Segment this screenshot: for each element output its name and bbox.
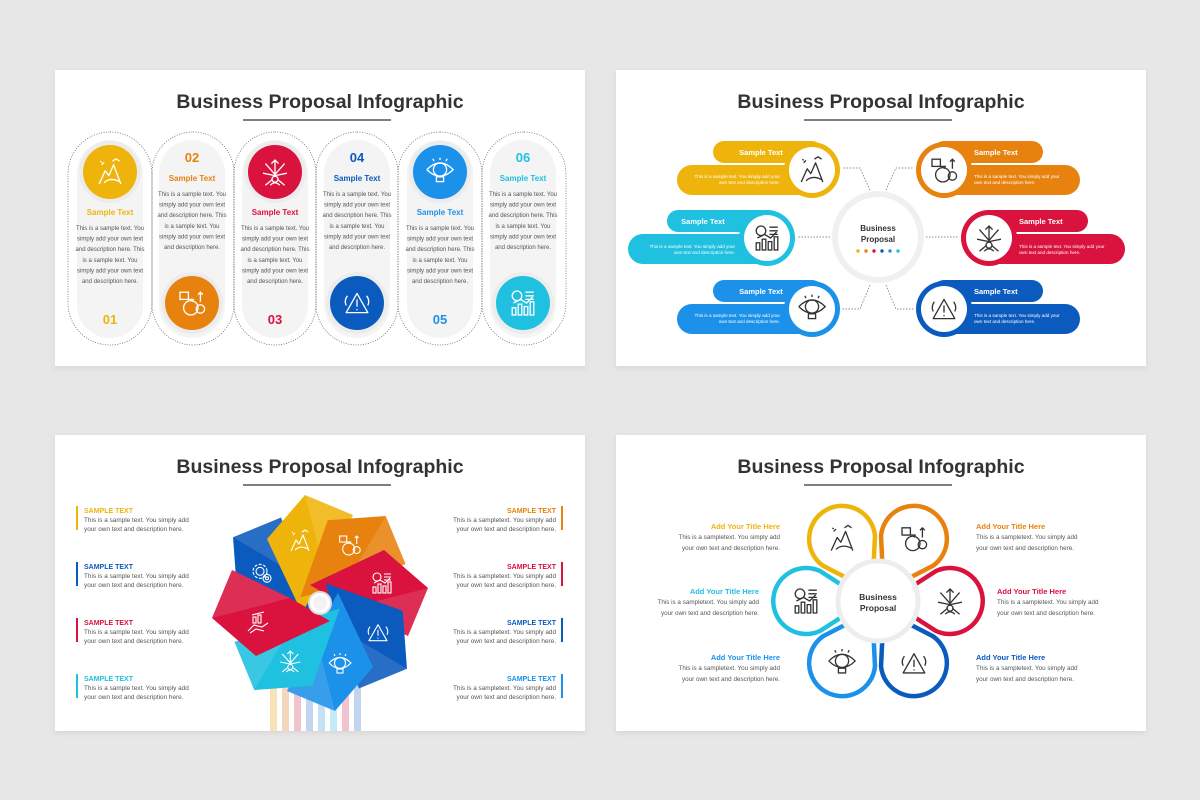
step 06: is a sample text. You	[495, 224, 551, 230]
slide 2: hub diagram	[616, 70, 1146, 366]
step 06: Sample Text	[500, 174, 547, 183]
title: Business Proposal Infographic	[737, 91, 1025, 113]
step 06	[489, 140, 557, 338]
left text items: This is a sampletext. You simply add	[657, 599, 759, 606]
step 01: is a sample text. You	[82, 258, 138, 264]
step 06: simply add your own text	[490, 234, 556, 240]
step 05: is a sample text. You	[412, 258, 468, 264]
step 05: Sample Text	[417, 208, 464, 217]
step 03: simply add your own text	[242, 237, 308, 243]
step 05: and description here. This	[406, 247, 474, 253]
right text items: This is a sampletext. You simply add	[453, 573, 556, 580]
left text items: SAMPLE TEXT	[84, 564, 134, 571]
right text items: your own text and description here.	[457, 638, 556, 645]
step 04: and description here.	[329, 245, 385, 251]
left text items: your own text and description here.	[84, 694, 184, 701]
right text items: This is a sampletext. You simply add	[997, 599, 1099, 606]
left text items: your own text and description here.	[84, 526, 184, 533]
step 06: simply add your own text	[490, 203, 556, 209]
item: blue: Sample Text	[739, 287, 783, 296]
item: blue	[677, 280, 840, 337]
step 03: simply add your own text	[242, 268, 308, 274]
left text items: your own text and description here.	[84, 638, 184, 645]
right text items: your own text and description here.	[976, 545, 1074, 552]
title: Business Proposal Infographic	[176, 91, 464, 113]
right text items: Add Your Title Here	[976, 522, 1045, 531]
step 02: simply add your own text	[159, 234, 225, 240]
item: yellow: This is a sample text. You simply add your	[694, 174, 780, 179]
connectors	[798, 168, 958, 309]
item: cyan: This is a sample text. You simply add your	[649, 244, 735, 249]
right text items: This is a sampletext. You simply add	[453, 517, 556, 524]
step 04: Sample Text	[334, 174, 381, 183]
item: blue: own text and description here.	[719, 319, 780, 324]
step 03: This is a sample text. You	[241, 226, 309, 232]
right text items: This is a sampletext. You simply add	[976, 534, 1078, 541]
step 04	[323, 140, 391, 338]
right text items: SAMPLE TEXT	[507, 508, 557, 515]
left text items: your own text and description here.	[84, 582, 184, 589]
title: Business Proposal Infographic	[176, 456, 464, 478]
center hub	[832, 191, 924, 283]
item: dark blue: own text and description here.	[974, 319, 1035, 324]
left text items: Add Your Title Here	[690, 587, 759, 596]
right text items: your own text and description here.	[457, 526, 556, 533]
step 01: and description here. This	[76, 247, 144, 253]
center circle	[838, 561, 918, 641]
step 04: and description here. This	[323, 213, 391, 219]
item: cyan: Sample Text	[681, 217, 725, 226]
center circle: Proposal	[860, 603, 896, 613]
petals	[773, 494, 983, 708]
left text items: your own text and description here.	[682, 676, 780, 683]
step 06: This is a sample text. You	[489, 192, 557, 198]
right text items: This is a sampletext. You simply add	[453, 629, 556, 636]
step 01: simply add your own text	[77, 268, 143, 274]
right text items: your own text and description here.	[457, 582, 556, 589]
step 03: Sample Text	[252, 208, 299, 217]
step 02: Sample Text	[169, 174, 216, 183]
step 04: simply add your own text	[324, 203, 390, 209]
dotted path outlines	[68, 132, 566, 345]
left text items: Add Your Title Here	[711, 653, 780, 662]
left text items	[657, 522, 780, 683]
item: yellow: Sample Text	[739, 148, 783, 157]
step 03: and description here. This	[241, 247, 309, 253]
item: orange: Sample Text	[974, 148, 1018, 157]
left text items: SAMPLE TEXT	[84, 620, 134, 627]
left text items: your own text and description here.	[682, 545, 780, 552]
step 02: is a sample text. You	[164, 224, 220, 230]
step 06: and description here.	[495, 245, 551, 251]
item: yellow	[677, 141, 840, 198]
right text items: your own text and description here.	[976, 676, 1074, 683]
right text items: SAMPLE TEXT	[507, 676, 557, 683]
item: red: own text and description here.	[1019, 250, 1080, 255]
step 02: and description here. This	[158, 213, 226, 219]
pinwheel	[206, 489, 434, 717]
slide 4: flower diagram	[616, 435, 1146, 731]
step 05: simply add your own text	[407, 268, 473, 274]
left text items: This is a sample text. You simply add	[84, 573, 189, 580]
step 05: and description here.	[412, 279, 468, 285]
item: orange: own text and description here.	[974, 180, 1035, 185]
left text items: SAMPLE TEXT	[84, 508, 134, 515]
left text items: Add Your Title Here	[711, 522, 780, 531]
step 01: This is a sample text. You	[76, 226, 144, 232]
item: dark blue	[916, 280, 1080, 337]
left text items: This is a sample text. You simply add	[84, 629, 189, 636]
item: orange	[916, 141, 1080, 198]
item: dark blue: This is a sample text. You simply add your	[974, 313, 1060, 318]
item: yellow: own text and description here.	[719, 180, 780, 185]
item: red: Sample Text	[1019, 217, 1063, 226]
step 06: and description here. This	[489, 213, 557, 219]
right text items: SAMPLE TEXT	[507, 564, 557, 571]
right text items: Add Your Title Here	[997, 587, 1066, 596]
step 03	[241, 140, 309, 338]
center hub: Business	[860, 224, 896, 233]
step 03: is a sample text. You	[247, 258, 303, 264]
right text items: Add Your Title Here	[976, 653, 1045, 662]
item: cyan	[628, 210, 795, 266]
item: red	[961, 210, 1125, 266]
right text items: This is a sampletext. You simply add	[453, 685, 556, 692]
center circle: Business	[859, 592, 897, 602]
center hub: Proposal	[861, 235, 895, 244]
step 01	[76, 140, 144, 338]
right text items: your own text and description here.	[997, 610, 1095, 617]
step 02: simply add your own text	[159, 203, 225, 209]
left text items: This is a sampletext. You simply add	[678, 665, 780, 672]
item: dark blue: Sample Text	[974, 287, 1018, 296]
right text items	[453, 506, 563, 701]
step 05: This is a sample text. You	[406, 226, 474, 232]
step 02: This is a sample text. You	[158, 192, 226, 198]
step 04: This is a sample text. You	[323, 192, 391, 198]
step 05	[406, 140, 474, 338]
step 02: 02	[185, 150, 199, 165]
right text items: This is a sampletext. You simply add	[976, 665, 1078, 672]
stripes	[270, 680, 361, 731]
left text items	[76, 506, 189, 701]
step 05: simply add your own text	[407, 237, 473, 243]
step 04: simply add your own text	[324, 234, 390, 240]
slide 1: step process	[55, 70, 585, 366]
left text items: This is a sample text. You simply add	[84, 517, 189, 524]
right text items: your own text and description here.	[457, 694, 556, 701]
step 01: Sample Text	[87, 208, 134, 217]
step 01: simply add your own text	[77, 237, 143, 243]
left text items: SAMPLE TEXT	[84, 676, 134, 683]
step 04: is a sample text. You	[329, 224, 385, 230]
step 01: 01	[103, 312, 117, 327]
item: blue: This is a sample text. You simply add your	[694, 313, 780, 318]
left text items: This is a sample text. You simply add	[84, 685, 189, 692]
step 03: and description here.	[247, 279, 303, 285]
slide 3: pinwheel	[55, 435, 585, 731]
item: red: This is a sample text. You simply add your	[1019, 244, 1105, 249]
step 05: 05	[433, 312, 447, 327]
item: orange: This is a sample text. You simply add your	[974, 174, 1060, 179]
step 02	[158, 140, 226, 338]
left text items: This is a sampletext. You simply add	[678, 534, 780, 541]
left text items: your own text and description here.	[661, 610, 759, 617]
step 06: 06	[516, 150, 530, 165]
right text items: SAMPLE TEXT	[507, 620, 557, 627]
item: cyan: own text and description here.	[674, 250, 735, 255]
title: Business Proposal Infographic	[737, 456, 1025, 478]
step 01: and description here.	[82, 279, 138, 285]
step 02: and description here.	[164, 245, 220, 251]
step 04: 04	[350, 150, 365, 165]
right text items	[976, 522, 1099, 683]
step 03: 03	[268, 312, 282, 327]
